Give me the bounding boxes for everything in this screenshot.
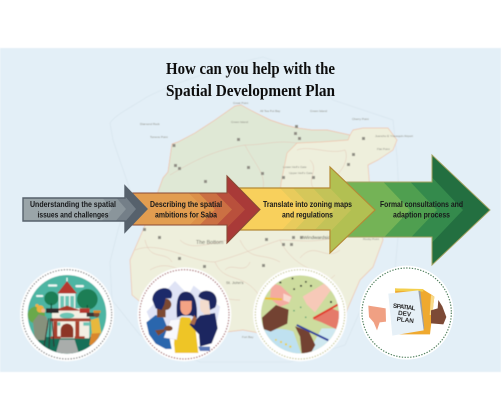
map tiny labels: Great Point bbox=[233, 101, 248, 105]
map tiny labels: Flat Point bbox=[377, 147, 390, 151]
island land, green north-west bbox=[155, 105, 350, 200]
circle 4: spatial dev plan document with thumbs bbox=[360, 266, 454, 360]
document text: DEV bbox=[398, 310, 412, 319]
title: Spatial Development Plan bbox=[166, 81, 335, 100]
map tiny labels: Cherry Point bbox=[352, 117, 369, 121]
roads bbox=[135, 142, 350, 300]
map tiny labels: Lower Hell's Gate bbox=[283, 165, 307, 169]
title bbox=[166, 59, 335, 100]
island land, cream bbox=[130, 105, 397, 340]
circle 3: hands drawing on a map bbox=[253, 267, 347, 361]
map tiny labels: Fort Bay bbox=[242, 335, 254, 339]
document text: PLAN bbox=[396, 316, 415, 325]
arrow 4: formal consultations (green) bbox=[346, 154, 491, 266]
map tiny labels bbox=[140, 101, 413, 339]
arrow 3 text: Translate into zoning maps bbox=[263, 200, 352, 209]
reef boundary line bbox=[110, 57, 400, 362]
arrow 1: understanding the issues (grey) bbox=[22, 184, 148, 234]
map label: Windwardside: Windwardside bbox=[303, 235, 333, 241]
icon: document bbox=[388, 290, 424, 336]
arrow 3: translate into zoning maps (yellow) bbox=[238, 166, 376, 254]
map tiny labels: Upper Hell's Gate bbox=[289, 171, 313, 175]
map tiny labels: Green Island bbox=[310, 109, 328, 113]
arrow 4 text: Formal consultations and bbox=[380, 200, 463, 209]
arrow 3 text bbox=[263, 200, 352, 219]
circle 1: church and surveyors bbox=[20, 267, 114, 361]
map background: island of Saba bbox=[0, 48, 501, 372]
map tiny labels: Rocky Point bbox=[363, 237, 379, 241]
document text bbox=[393, 303, 416, 325]
arrow 2: describing the spatial ambitions (orange-red) bbox=[132, 174, 261, 244]
circle 2: three people discussing bbox=[137, 267, 231, 361]
map tiny labels: Green Island bbox=[231, 120, 249, 124]
icon: folder bbox=[395, 288, 434, 334]
map tiny labels: Torrens Point bbox=[150, 135, 168, 139]
map tiny labels: Juancho E Yrausquin Airport bbox=[375, 134, 413, 138]
document text: SPATIAL bbox=[393, 303, 416, 312]
arrow 4 text: adaption process bbox=[393, 210, 450, 219]
map tiny labels: All Tea Pot Bay bbox=[260, 109, 281, 113]
arrow 2 text: Describing the spatial bbox=[150, 200, 222, 209]
map place markers bbox=[143, 125, 365, 268]
arrow 2 text: ambitions for Saba bbox=[155, 210, 217, 219]
title: How can you help with the bbox=[166, 59, 335, 78]
arrow 1 text bbox=[30, 200, 116, 219]
map label: The Bottom: The Bottom bbox=[196, 240, 224, 246]
arrow 1 text: Understanding the spatial bbox=[30, 200, 116, 209]
map label: St. John's: St. John's bbox=[226, 280, 243, 285]
arrow 1 text: issues and challenges bbox=[38, 210, 109, 219]
icon: thumbs up bbox=[431, 300, 446, 324]
arrow 4 text bbox=[380, 200, 463, 219]
arrow 3 text: and regulations bbox=[282, 210, 333, 219]
infographic canvas bbox=[0, 48, 501, 372]
icon: thumbs down bbox=[368, 306, 386, 330]
arrow 2 text bbox=[150, 200, 222, 219]
sea bbox=[0, 48, 501, 372]
map tiny labels: Diamond Rock bbox=[140, 122, 160, 126]
